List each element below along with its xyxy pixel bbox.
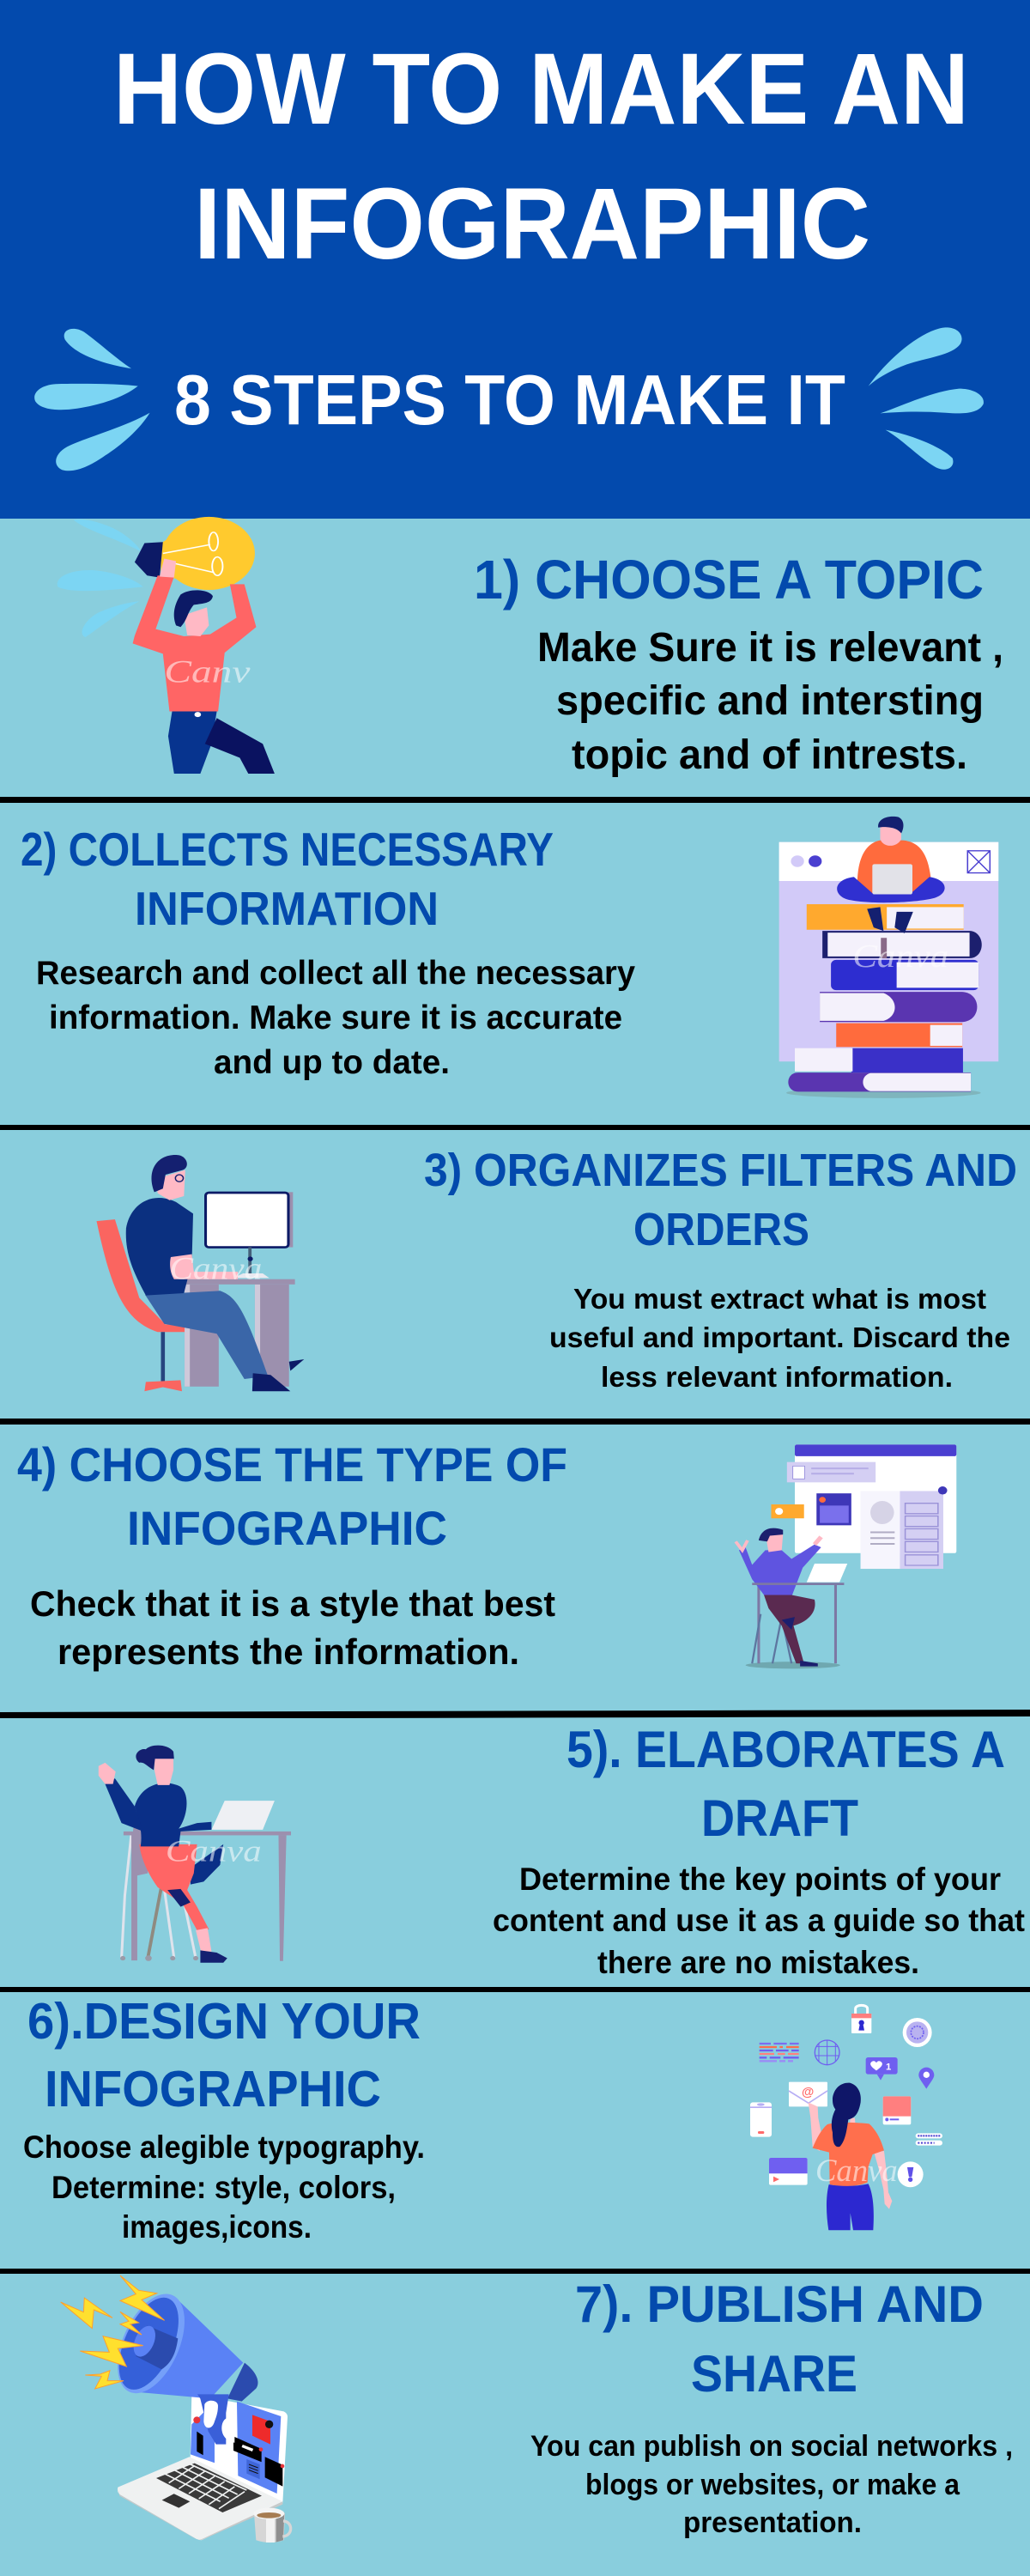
divider	[0, 797, 1030, 803]
step 5 text: content and use it as a guide so that	[493, 1903, 1025, 1938]
illustration: woman with web page layouts	[736, 1444, 956, 1668]
step 5 text	[493, 1862, 1025, 1980]
illustration: person on stack of books	[779, 817, 998, 1098]
illustration: woman surrounded by app icons: Canva	[815, 2153, 898, 2188]
illustration: man at computer: Canva	[169, 1252, 262, 1286]
icon: left splash drops	[34, 329, 149, 471]
step 1 text: topic and of intrests.	[572, 732, 967, 778]
step 7 heading: SHARE	[691, 2345, 857, 2403]
step 4 heading: INFOGRAPHIC	[127, 1501, 447, 1555]
step 6 text: Determine: style, colors,	[52, 2170, 396, 2205]
panel: step 7 publish and share	[0, 2274, 1030, 2576]
illustration: woman at laptop on stool: Canva	[166, 1833, 262, 1868]
header panel	[0, 0, 1030, 519]
illustration: person holding light bulb	[58, 517, 275, 774]
step 7 text	[530, 2430, 1013, 2539]
step 2 text	[36, 955, 635, 1081]
step 3 text: less relevant information.	[601, 1361, 953, 1393]
panel: step 6 design your infographic	[0, 1992, 1030, 2269]
illustration: man at computer	[96, 1155, 304, 1391]
step 6 text: images,icons.	[122, 2209, 312, 2245]
step 4 text: Check that it is a style that best	[30, 1583, 555, 1624]
step 6 heading	[27, 1993, 421, 2117]
step 7 heading: 7). PUBLISH AND	[575, 2275, 984, 2333]
step 2 heading: INFORMATION	[135, 882, 439, 935]
panel: step 1 choose a topic	[0, 517, 1030, 797]
step 1 text: Make Sure it is relevant ,	[537, 625, 1003, 671]
step 2 text: and up to date.	[214, 1044, 450, 1081]
illustration: woman surrounded by app icons	[750, 2005, 942, 2230]
step 3 text: useful and important. Discard the	[549, 1321, 1010, 1353]
illustration: person on stack of books: Canva	[852, 938, 948, 974]
step 7 text: blogs or websites, or make a	[585, 2469, 960, 2501]
step 2 heading	[21, 823, 554, 935]
illustration: woman surrounded by app icons: @	[802, 2086, 814, 2099]
step 5 heading	[566, 1721, 1005, 1847]
subtitle: 8 STEPS TO MAKE IT	[174, 360, 845, 440]
step 2 text: information. Make sure it is accurate	[49, 999, 622, 1036]
step 5 text: there are no mistakes.	[597, 1945, 919, 1980]
step 4 heading: 4) CHOOSE THE TYPE OF	[17, 1437, 567, 1492]
illustration: woman at laptop on stool	[99, 1746, 291, 1963]
step 3 heading: ORDERS	[633, 1204, 809, 1255]
step 1 heading: 1) CHOOSE A TOPIC	[474, 549, 984, 611]
panel: step 5 elaborates a draft	[0, 1718, 1030, 1987]
step 4 text: represents the information.	[58, 1631, 519, 1672]
step 6 text	[23, 2129, 425, 2245]
step 2 text: Research and collect all the necessary	[36, 955, 635, 992]
step 4 heading	[17, 1437, 567, 1555]
step 7 heading	[575, 2275, 984, 2403]
step 5 text: Determine the key points of your	[519, 1862, 1001, 1897]
title	[113, 33, 969, 281]
step 7 text: You can publish on social networks ,	[530, 2430, 1013, 2463]
step 6 heading: 6).DESIGN YOUR	[27, 1993, 421, 2050]
step 6 heading: INFOGRAPHIC	[45, 2061, 381, 2117]
step 5 heading: 5). ELABORATES A	[566, 1721, 1005, 1778]
illustration: person holding light bulb: Canv	[164, 654, 251, 690]
divider	[0, 1419, 1030, 1425]
step 6 text: Choose alegible typography.	[23, 2129, 425, 2165]
step 3 text	[549, 1283, 1010, 1393]
illustration: woman surrounded by app icons: 1	[886, 2063, 891, 2073]
divider	[0, 2269, 1030, 2274]
step 2 heading: 2) COLLECTS NECESSARY	[21, 823, 554, 876]
step 1 text: specific and intersting	[556, 678, 984, 724]
panel: step 3 organizes filters and orders	[0, 1130, 1030, 1419]
panel: step 2 collects necessary information	[0, 803, 1030, 1125]
step 7 text: presentation.	[683, 2506, 862, 2539]
step 3 text: You must extract what is most	[573, 1283, 986, 1315]
title: INFOGRAPHIC	[194, 167, 870, 281]
divider	[0, 1710, 1030, 1719]
step 3 heading	[424, 1145, 1017, 1255]
divider	[0, 1987, 1030, 1992]
title: HOW TO MAKE AN	[113, 33, 969, 146]
step 5 heading: DRAFT	[701, 1789, 858, 1847]
step 4 text	[30, 1583, 555, 1672]
icon: right splash drops	[869, 327, 984, 470]
illustration: megaphone and laptop	[61, 2275, 291, 2543]
step 1 text	[537, 625, 1003, 778]
panel: step 4 choose the type of infographic	[0, 1425, 1030, 1712]
divider	[0, 1125, 1030, 1130]
